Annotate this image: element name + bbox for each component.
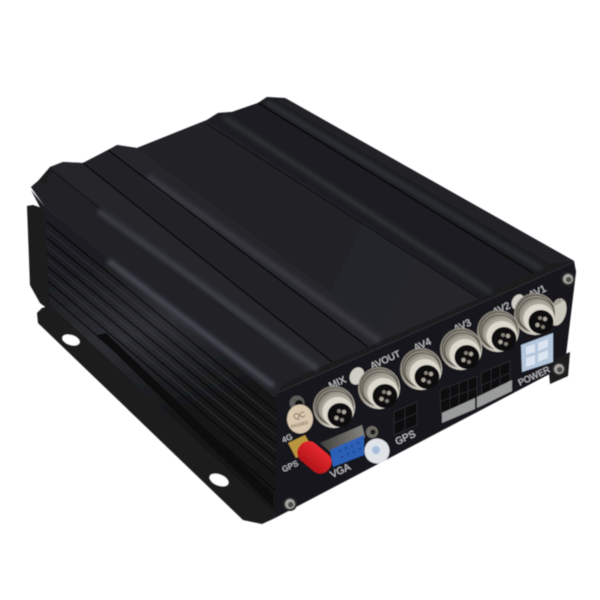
connector AV1 [514, 293, 556, 335]
right lower flange [548, 352, 570, 384]
screw bottom right [552, 362, 566, 376]
flat band 2 [232, 103, 533, 287]
port label MIX: MIX [327, 374, 348, 392]
antenna gold base [288, 435, 313, 458]
grey label strip one [442, 398, 475, 423]
port label VGA: VGA [329, 462, 353, 481]
port label AV3: AV3 [452, 317, 474, 335]
port label AV1: AV1 [527, 283, 549, 301]
band between rib 1 and rib 2 [46, 172, 307, 385]
12-pin connector one [440, 376, 477, 413]
rib highlights [100, 103, 540, 385]
connector AV3 [440, 328, 482, 370]
port label AV4: AV4 [412, 336, 434, 354]
round warranty sticker [364, 438, 390, 464]
rib 3 [108, 145, 390, 347]
port label 4G: 4G [280, 432, 294, 445]
audio jack [290, 396, 304, 410]
rib 5 [258, 97, 550, 273]
white pad near AV OUT [347, 365, 367, 387]
power terminal block [521, 333, 553, 372]
VGA port [320, 425, 365, 467]
QC sticker: QC [292, 410, 307, 421]
left mounting flange [37, 305, 275, 524]
rib grooves [83, 103, 533, 362]
front panel [275, 262, 576, 518]
screw bottom left [283, 497, 297, 511]
centre flat panel [137, 120, 480, 337]
rear left side bracket [27, 205, 52, 312]
side fin grooves [47, 222, 277, 492]
rib 4 [207, 112, 500, 298]
WIFI antenna port [547, 296, 569, 328]
12-pin connector two [481, 361, 510, 397]
rib 1 [31, 181, 284, 398]
flange hole left [61, 332, 81, 348]
connector AV OUT [358, 367, 400, 409]
WIFI antenna port: WIFI [551, 297, 566, 308]
white pad near AV1 [509, 292, 527, 312]
port label POWER: POWER [516, 364, 552, 388]
QC sticker [287, 404, 313, 434]
screw top right [561, 272, 575, 286]
connector AV2 [477, 310, 519, 352]
connector MIX [313, 386, 355, 428]
antenna red cap [293, 437, 336, 478]
port label AV OUT: AVOUT [369, 349, 403, 372]
port label AV2: AV2 [491, 300, 513, 318]
GPS connector [394, 402, 417, 435]
connector AV4 [400, 348, 442, 390]
top face with ribs [31, 97, 576, 398]
port label GPS antenna: GPS [281, 459, 300, 474]
flat band [83, 150, 368, 362]
QC sticker: PASSED [290, 420, 310, 429]
port label GPS: GPS [394, 429, 418, 448]
side face with fins [31, 190, 277, 515]
grey label strip two [477, 380, 512, 408]
top base plate [31, 97, 576, 396]
rib 2 [50, 162, 332, 373]
outer band [276, 98, 574, 264]
shadow band under side [97, 333, 273, 507]
VGA jack screw [366, 426, 378, 438]
flange hole right [208, 471, 230, 489]
